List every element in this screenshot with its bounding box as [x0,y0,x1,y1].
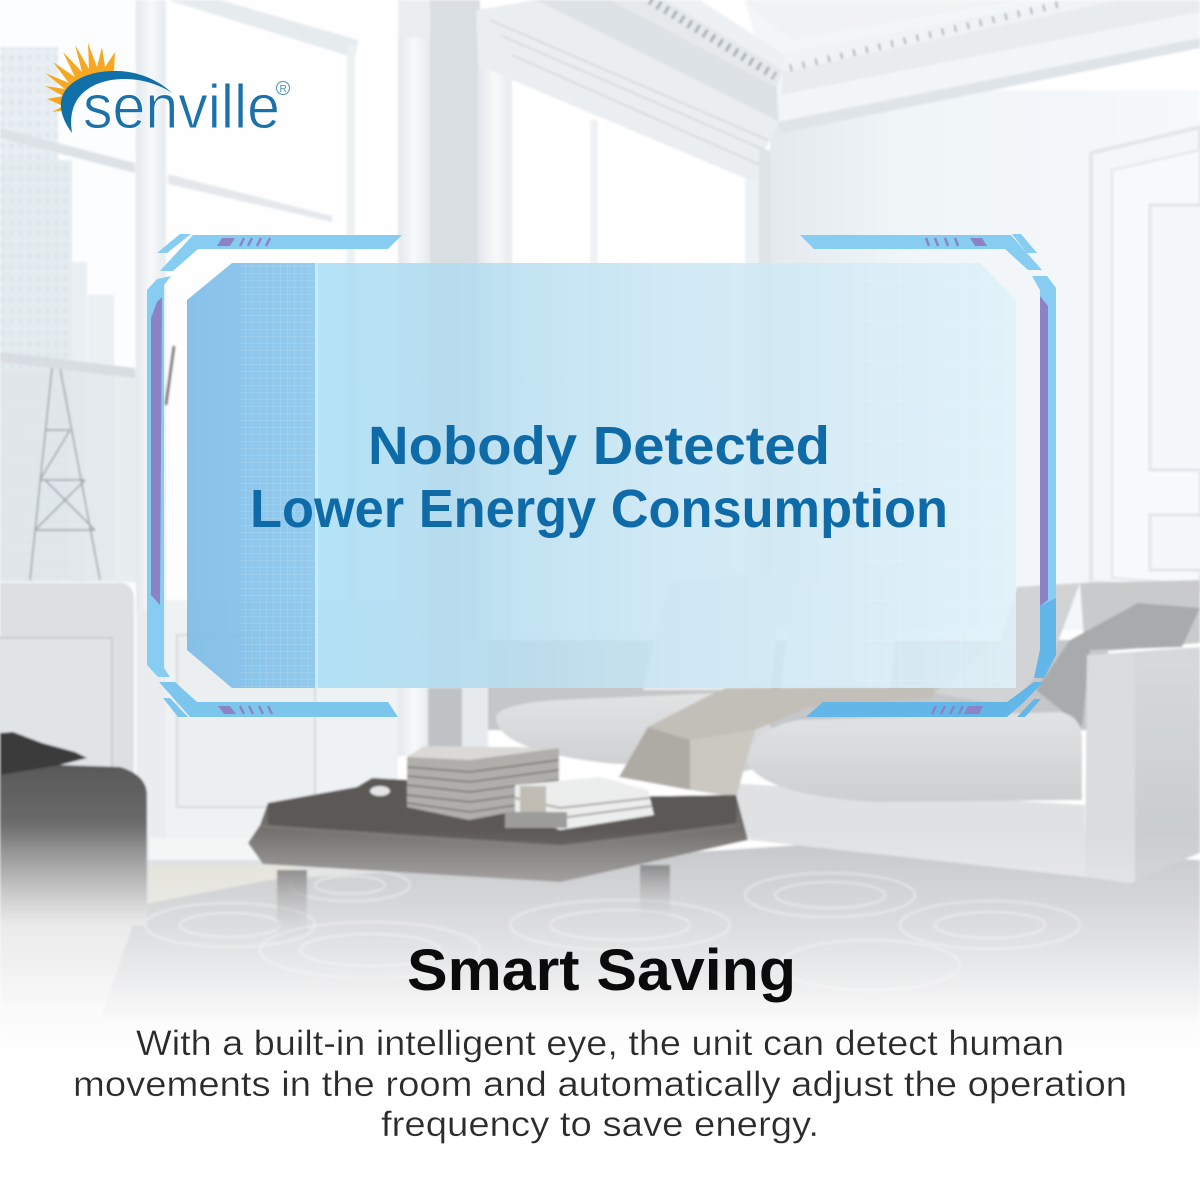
body text: With a built-in intelligent eye, the unit can detect human [136,1024,1064,1063]
translucent blue panel [187,263,1016,688]
blanket [619,687,934,797]
coffee table tray [248,778,748,940]
right wall [770,90,1200,630]
heading: Smart Saving: Smart Saving [407,938,796,1003]
registered mark [276,82,290,95]
heading: Nobody Detected / Lower Energy Consumption: Lower Energy Consumption [250,479,948,539]
mesh texture and bright seam [240,263,1016,688]
bottom left bracket [159,682,398,717]
registered mark: R [280,84,287,95]
left side bar [147,276,171,677]
left window with city [0,0,136,590]
HUD frame corners [147,234,1056,717]
left wall panel below window [0,583,464,866]
stacked books [407,746,654,830]
wordmark: senville [83,73,280,142]
window handle [166,346,174,405]
seat cushions [496,692,800,772]
right side bar [1032,276,1056,678]
body text: movements in the room and automatically adjust the operation [73,1065,1127,1104]
heading: Nobody Detected / Lower Energy Consumption: Nobody Detected [368,416,830,476]
icon: sun rays [45,43,123,112]
top left bracket [157,234,402,271]
logo: Senville [45,43,290,142]
window frames and columns [136,0,779,756]
soft white fade at the bottom [0,830,1200,1060]
right wall door panels [1091,127,1200,590]
top right bracket [800,234,1042,270]
left chair with dark throw [0,732,147,925]
sofa [462,570,1200,883]
floor and rug [0,845,1200,1060]
bottom right bracket [806,682,1043,717]
body text: frequency to save energy. [381,1105,819,1144]
pillows [643,570,784,690]
sofa arm [1085,647,1200,883]
ceiling with crown molding [535,0,1200,133]
heading: Nobody Detected / Lower Energy Consumption [250,416,948,539]
body text [73,1024,1127,1144]
icon: blue swoosh [61,71,172,133]
